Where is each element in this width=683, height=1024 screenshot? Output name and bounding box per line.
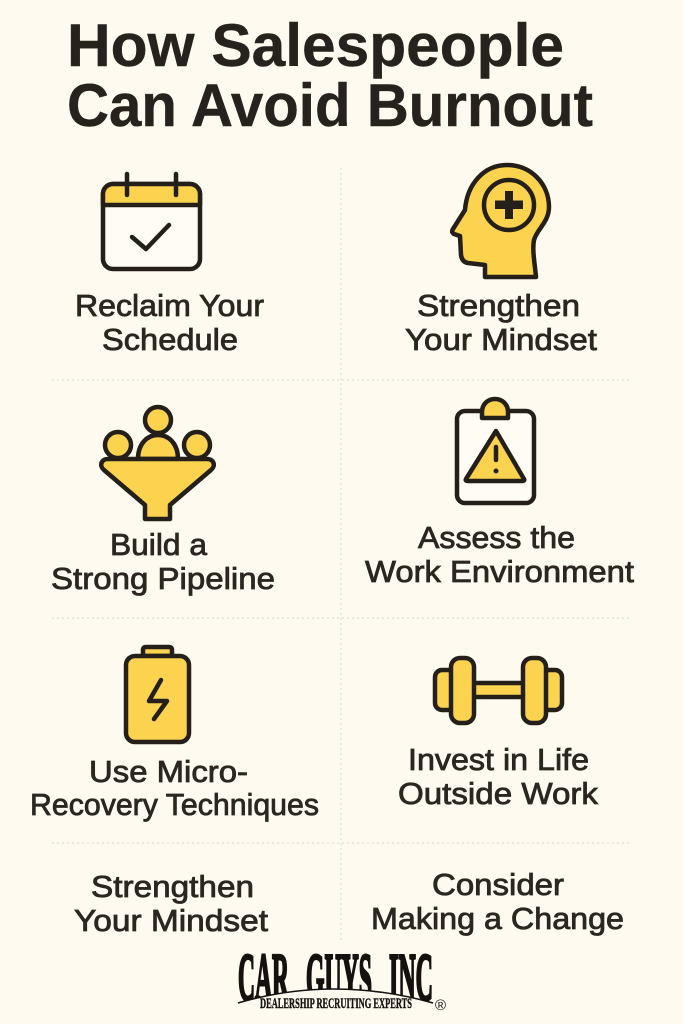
panel: invest in life outside work: [398, 658, 599, 811]
icon: clipboard with warning triangle: [457, 399, 534, 503]
icon: funnel with people: [101, 407, 214, 519]
label: reclaim your schedule: Schedule: [102, 322, 238, 357]
panel: build a strong pipeline: [51, 407, 275, 596]
label: use micro-recovery techniques: Recovery Techniques: [30, 787, 319, 822]
label: strengthen your mindset (bottom): [74, 869, 268, 938]
label: use micro-recovery techniques: Use Micro-: [89, 754, 248, 789]
icon: dumbbell: [435, 658, 562, 723]
label: build a strong pipeline: [51, 527, 275, 596]
panel: strengthen your mindset (top): [405, 165, 597, 357]
label: strengthen your mindset: Strengthen: [417, 288, 580, 323]
panel: reclaim your schedule: [75, 174, 264, 357]
text: INC: [389, 939, 433, 1015]
title: [67, 12, 593, 139]
logo: car guys inc: DEALERSHIP RECRUITING EXPERTS: [260, 996, 412, 1012]
title: How Salespeople: [67, 12, 564, 79]
label: strengthen your mindset (bottom): Strengthen: [91, 869, 254, 904]
label: assess the work environment: [365, 520, 634, 589]
panel: assess the work environment: [365, 399, 634, 589]
label: invest in life outside work: Invest in Life: [408, 742, 589, 777]
icon: calendar with check mark: [103, 174, 200, 269]
label: consider making a change: Making a Change: [371, 901, 624, 936]
label: assess the work environment: Work Environment: [365, 554, 634, 589]
logo: car guys inc: GUYS: [306, 939, 372, 1015]
panel: use micro-recovery techniques: [30, 647, 319, 822]
label: reclaim your schedule: [75, 288, 264, 357]
title: Can Avoid Burnout: [67, 72, 593, 139]
label: build a strong pipeline: Build a: [110, 527, 208, 562]
label: strengthen your mindset: [405, 288, 597, 357]
label: use micro-recovery techniques: [30, 754, 319, 822]
label: consider making a change: Consider: [432, 867, 564, 902]
logo: car guys inc: CAR: [238, 939, 289, 1015]
label: assess the work environment: Assess the: [418, 520, 575, 555]
label: reclaim your schedule: Reclaim Your: [75, 288, 264, 323]
label: strengthen your mindset: Your Mindset: [405, 322, 597, 357]
label: build a strong pipeline: Strong Pipeline: [51, 561, 275, 596]
label: invest in life outside work: Outside Work: [398, 776, 599, 811]
logo: car guys inc: ®: [435, 997, 446, 1014]
logo: car guys inc: [230, 939, 446, 1024]
label: consider making a change: [371, 867, 624, 936]
icon: head with plus: [452, 165, 549, 277]
label: strengthen your mindset (bottom): Your Mindset: [74, 903, 268, 938]
icon: battery with bolt: [126, 647, 189, 742]
label: invest in life outside work: [398, 742, 599, 811]
